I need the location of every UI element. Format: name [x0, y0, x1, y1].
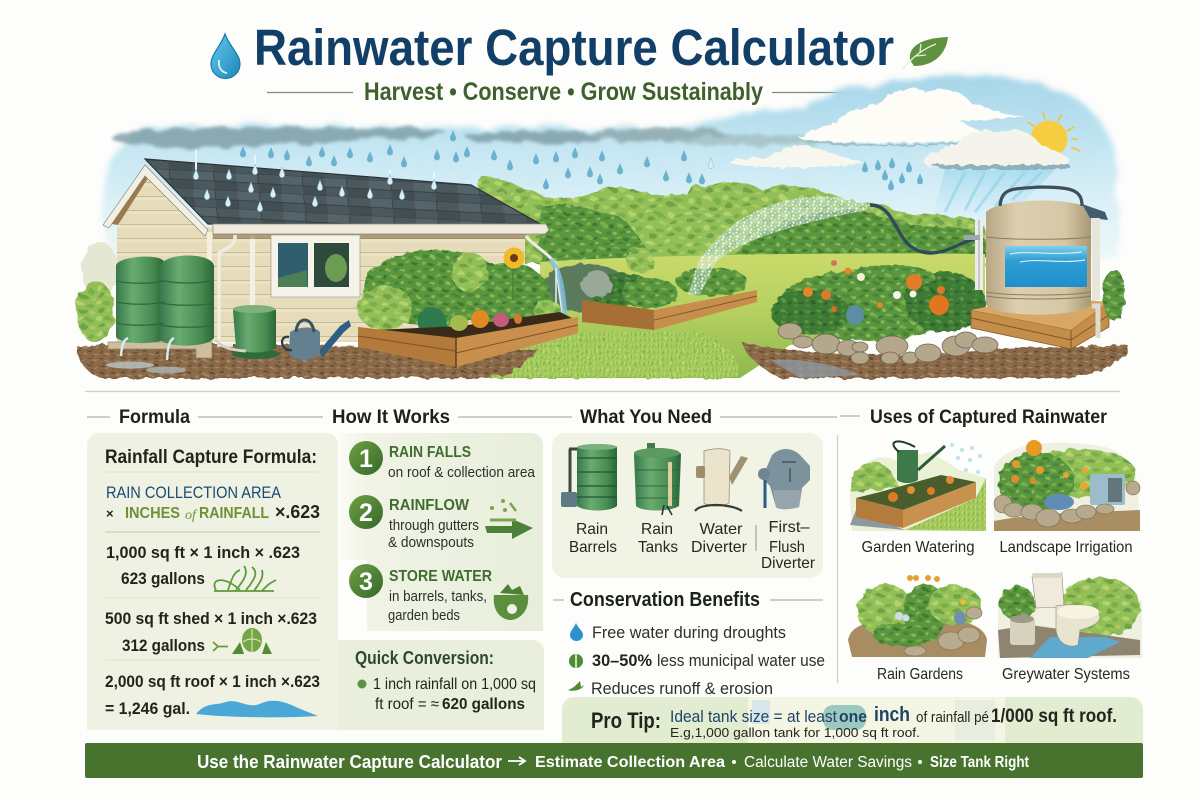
twin rain barrels — [106, 256, 214, 374]
footer banner — [85, 743, 1143, 778]
step 1: RAIN FALLS — [389, 444, 471, 461]
water stream — [550, 260, 565, 317]
icon: arrow — [213, 642, 228, 651]
gutter — [213, 224, 549, 234]
rock border — [778, 323, 998, 364]
labels: First– — [768, 519, 810, 536]
dirt ground: left — [78, 343, 540, 378]
cloud right — [924, 129, 1070, 170]
labels: Flush — [769, 539, 805, 556]
step 2: RAINFLOW — [389, 497, 470, 514]
pipes — [975, 220, 983, 290]
timber — [358, 327, 456, 367]
labels — [569, 519, 816, 572]
benefit 2: 30–50% — [592, 652, 652, 670]
icon: grass — [214, 566, 276, 591]
labels: Rain — [576, 521, 608, 538]
heading: conservation benefits: Conservation Benefits — [570, 589, 760, 611]
cloud large — [799, 88, 1025, 146]
plants — [357, 250, 562, 337]
icon: plant — [232, 628, 272, 654]
benefit 2 — [569, 652, 825, 670]
icon: rain tank — [634, 443, 681, 515]
roof water drops — [193, 150, 437, 212]
use: rain gardens: Rain Gardens — [877, 666, 963, 683]
step 2: through gutters — [389, 517, 479, 534]
panel: what you need — [552, 433, 823, 578]
example 3: 2,000 sq ft roof × 1 inch ×.623 — [105, 672, 320, 691]
house — [103, 150, 565, 345]
panel: pro tip: of rainfall pé — [916, 709, 989, 726]
icon: green bowl — [494, 584, 528, 620]
storage tank — [964, 187, 1109, 349]
example 2: 500 sq ft shed × 1 inch ×.623 — [105, 609, 317, 628]
use: garden watering: Garden Watering — [862, 539, 974, 556]
heading: how it works: How It Works — [332, 407, 450, 428]
small green bucket — [216, 305, 280, 359]
benefit 3: Reduces runoff & erosion — [591, 680, 773, 698]
wall — [117, 227, 525, 342]
panel: quick conversion — [338, 640, 544, 730]
example 3 — [105, 672, 320, 718]
labels: Water — [700, 521, 743, 538]
panel: how it works — [340, 433, 543, 631]
heading: uses: Uses of Captured Rainwater — [870, 407, 1108, 428]
formula expression: × — [106, 506, 114, 521]
formula expression: of — [185, 508, 198, 523]
section: conservation benefits — [553, 589, 825, 698]
icon: flow arrow — [485, 499, 533, 539]
white clouds and sun — [729, 88, 1080, 170]
second raised bed — [581, 247, 757, 330]
sunflower — [504, 248, 524, 300]
right bush — [1103, 269, 1125, 321]
panel: pro tip: 1/000 sq ft roof. — [991, 706, 1117, 727]
step 2 — [349, 495, 533, 551]
example 2 — [105, 609, 317, 655]
body — [986, 200, 1091, 315]
panel: pro tip — [562, 697, 1143, 745]
hedge behind first bed — [541, 264, 629, 312]
panel: formula — [87, 433, 338, 730]
use: greywater systems — [998, 573, 1142, 683]
labels: Rain — [641, 521, 673, 538]
labels: Tanks — [638, 539, 678, 556]
dirt ground: right — [742, 342, 1128, 378]
sun — [1028, 112, 1080, 158]
formula expression: INCHES — [125, 505, 180, 522]
panel: quick conversion: 620 gallons — [442, 696, 525, 713]
formula expression: RAINFALL — [199, 505, 269, 522]
step 2: & downspouts — [388, 534, 474, 551]
panel: quick conversion: 1 inch rainfall on 1,000 sq — [373, 676, 536, 693]
labels: Diverter — [761, 555, 816, 572]
cloud small — [729, 146, 864, 168]
labels: Diverter — [691, 539, 748, 556]
icon: rain barrel — [561, 444, 617, 510]
use: greywater systems: Greywater Systems — [1002, 666, 1130, 683]
watering can — [282, 320, 351, 360]
step 1: on roof & collection area — [388, 464, 536, 481]
benefit 2: less municipal water use — [657, 652, 825, 670]
title block — [211, 19, 948, 106]
formula expression — [106, 483, 320, 523]
roof — [145, 159, 542, 225]
section: how it works — [332, 407, 572, 631]
panel: pro tip: Pro Tip: — [591, 708, 661, 733]
subtitle: Harvest • Conserve • Grow Sustainably — [364, 78, 763, 106]
footer banner: Use the Rainwater Capture Calculator — [197, 752, 502, 772]
title: Rainwater Capture Calculator — [254, 19, 894, 76]
wooden base — [971, 302, 1109, 349]
step 3: garden beds — [388, 607, 460, 624]
section: formula — [87, 407, 338, 730]
icon: water drop — [211, 34, 240, 78]
dark hill — [735, 210, 985, 258]
hero illustration — [76, 78, 1128, 378]
background trees — [478, 177, 985, 265]
benefit 1: Free water during droughts — [592, 624, 786, 642]
icon: water wave — [196, 701, 318, 717]
heading: formula: Formula — [119, 407, 190, 428]
icon: water diverter — [695, 449, 748, 511]
example 3: = 1,246 gal. — [105, 699, 190, 718]
left bushes — [76, 242, 118, 342]
downspouts — [219, 235, 235, 345]
meadow — [470, 253, 985, 378]
formula expression: ×.623 — [275, 502, 320, 522]
icon: first-flush diverter — [758, 449, 810, 509]
example 2: 312 gallons — [122, 636, 205, 655]
panel: pro tip: one — [839, 707, 867, 726]
handle — [1000, 187, 1082, 206]
step 1 — [349, 441, 536, 481]
footer banner: Size Tank Right — [930, 754, 1029, 771]
step 3: in barrels, tanks, — [389, 588, 487, 605]
panel: quick conversion: ft roof = ≈ — [375, 696, 439, 713]
rain shafts near tank — [930, 170, 1055, 225]
arrow — [508, 757, 525, 765]
formula heading: Rainfall Capture Formula: — [105, 447, 317, 468]
heading: what you need: What You Need — [580, 407, 712, 428]
sky rain drops — [240, 130, 923, 190]
hose and spray — [688, 196, 980, 295]
sky — [104, 78, 1120, 260]
window — [271, 235, 360, 297]
panel: pro tip: Ideal tank size = at least — [670, 707, 837, 726]
footer banner: Calculate Water Savings — [744, 754, 912, 771]
example 1: 623 gallons — [121, 569, 205, 588]
step 3: STORE WATER — [389, 568, 492, 585]
step 1: 1 — [359, 445, 373, 473]
labels: Barrels — [569, 539, 617, 556]
icon: leaf — [903, 37, 948, 69]
panel: pro tip: inch — [874, 704, 910, 726]
formula expression: RAIN COLLECTION AREA — [106, 483, 282, 502]
use: landscape irrigation: Landscape Irrigation — [1000, 539, 1132, 556]
use: garden watering — [850, 441, 986, 556]
step 3: 3 — [359, 568, 373, 596]
example 1 — [106, 543, 300, 591]
water window — [1005, 246, 1087, 287]
gable trim — [103, 165, 208, 236]
panel: pro tip: E.g,1,000 gallon tank for 1,000 sq ft roof. — [670, 725, 920, 740]
raised bed with plants — [357, 248, 578, 367]
flower garden — [770, 260, 985, 341]
step 2: 2 — [359, 499, 373, 527]
step 3 — [349, 564, 528, 624]
footer banner: Estimate Collection Area — [535, 754, 725, 771]
use: rain gardens — [848, 575, 987, 683]
panel: quick conversion: Quick Conversion: — [355, 648, 494, 668]
section: uses of captured rainwater — [840, 407, 1142, 683]
pale patch — [748, 697, 1005, 743]
rain clouds — [112, 127, 820, 148]
example 1: 1,000 sq ft × 1 inch × .623 — [106, 543, 300, 562]
section: what you need — [552, 407, 837, 578]
use: landscape irrigation — [994, 440, 1140, 556]
